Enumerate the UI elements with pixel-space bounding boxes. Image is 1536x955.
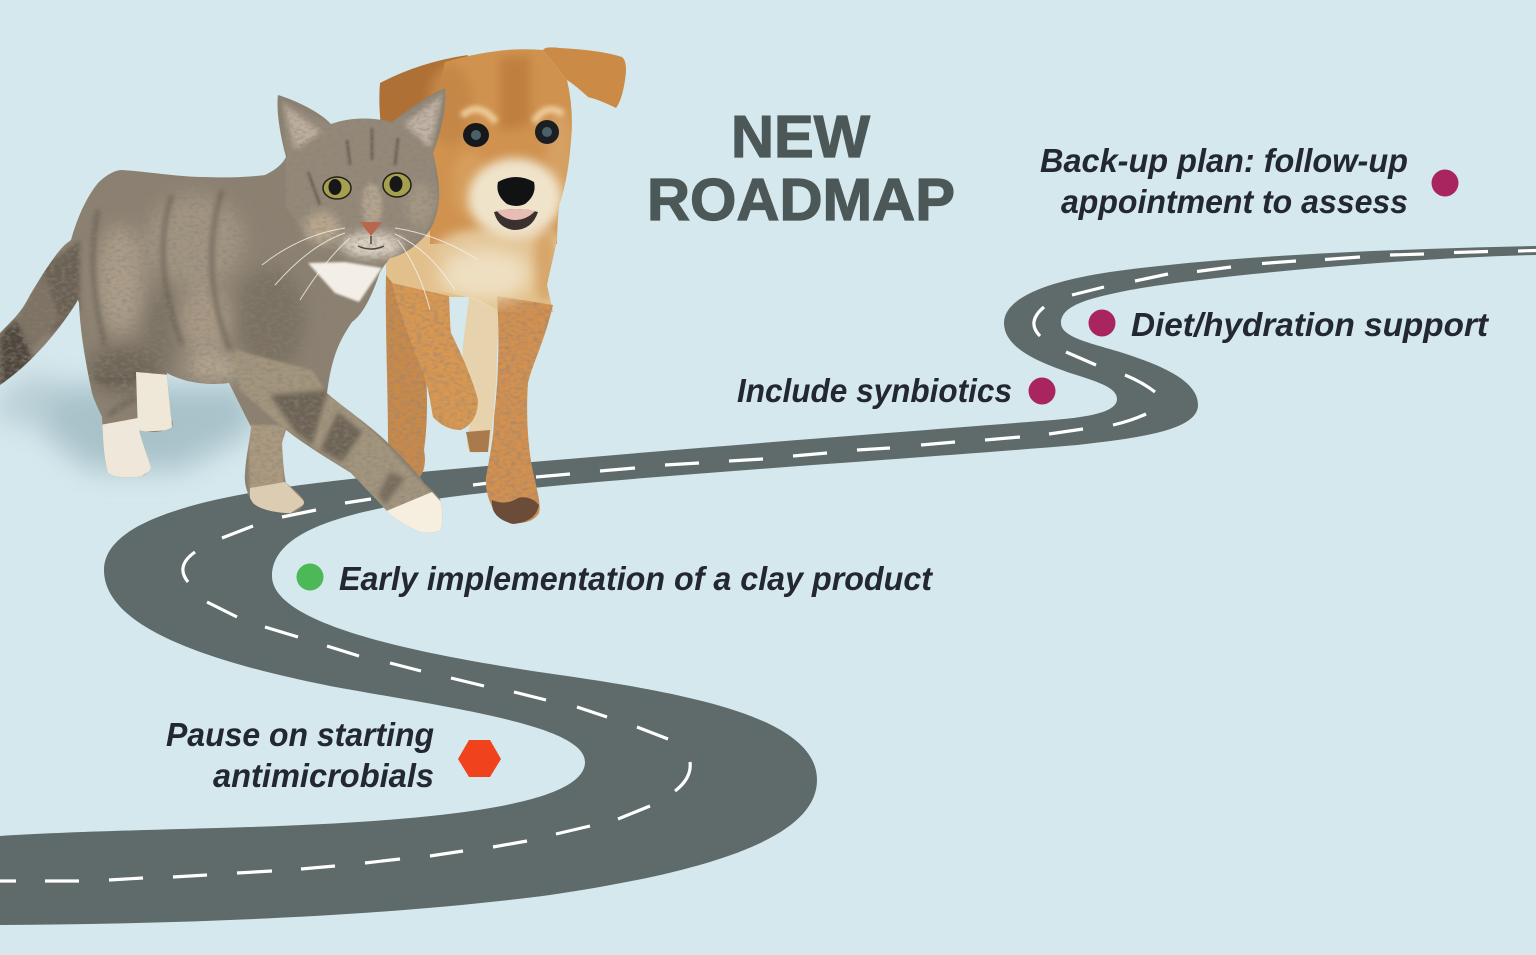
cat head [286, 92, 442, 247]
cat muzzle [342, 232, 402, 258]
cat stripes [93, 190, 230, 415]
dog muzzle [468, 158, 562, 238]
cat front leg [236, 350, 431, 511]
dog neck blend [432, 224, 557, 268]
milestone: back-up plan: Back-up plan: follow-up [1040, 142, 1408, 179]
milestone: pause on antimicrobials: Pause on starting [166, 716, 434, 753]
winding road [0, 246, 1536, 925]
cat far front leg [248, 424, 286, 497]
dog right front leg [486, 296, 553, 523]
cat nose [358, 222, 384, 249]
milestone: back-up plan: appointment to assess [1061, 183, 1408, 220]
cat white chest [308, 262, 382, 302]
cat eyes [323, 173, 411, 199]
dog head shading [428, 56, 575, 301]
milestone: clay product: Early implementation of a clay product [339, 560, 934, 597]
cat white leg and paws [136, 372, 172, 432]
milestone: back-up plan [1040, 142, 1458, 220]
dog photo illustration [379, 47, 626, 524]
cat cheek tones [304, 212, 340, 244]
cat body tones [87, 194, 305, 394]
dog middle rear leg [463, 297, 500, 453]
cat photo illustration [0, 80, 478, 540]
dog left ear [379, 55, 468, 135]
milestone: pause on antimicrobials [166, 716, 501, 794]
dog right ear [543, 47, 626, 108]
title [647, 104, 955, 233]
dog eyes [463, 120, 559, 147]
dog head [430, 49, 572, 244]
cat ear interiors [283, 104, 322, 150]
dog lifted front leg [392, 283, 478, 430]
road centre dashes [0, 250, 1536, 881]
dog nose and mouth [494, 177, 538, 230]
title: ROADMAP [647, 167, 955, 233]
dog torso and chest [386, 225, 557, 312]
title: NEW [731, 104, 870, 170]
cat tail bands [40, 240, 80, 335]
milestone: pause on antimicrobials: antimicrobials [213, 757, 434, 794]
soft shadow beneath the cat [0, 370, 255, 470]
dog far rear leg [386, 275, 449, 477]
dog chest highlight [439, 249, 531, 301]
dog rear paw [466, 430, 490, 452]
milestone: synbiotics: Include synbiotics [737, 372, 1012, 409]
dog paw toes [492, 497, 539, 524]
cat whiskers [262, 228, 478, 310]
milestone: diet and hydration: Diet/hydration support [1131, 306, 1490, 343]
